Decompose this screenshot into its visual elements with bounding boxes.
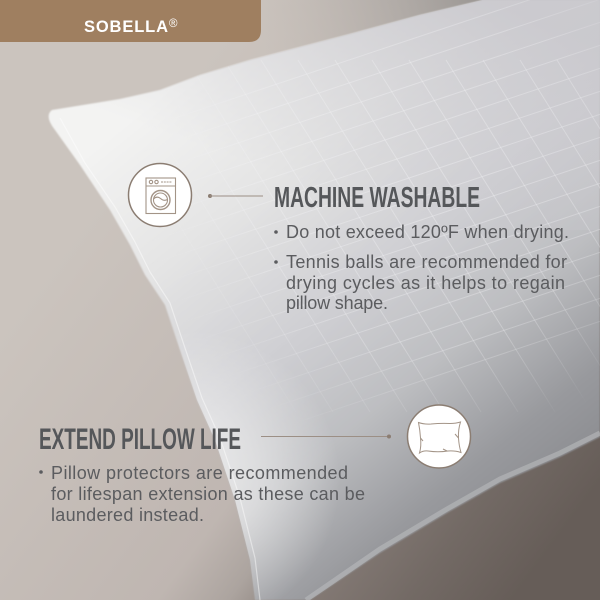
text block: machine washable tips: [274, 222, 569, 313]
heading: machine washable: MACHINE WASHABLE: [274, 182, 480, 214]
pillow piping: [118, 214, 260, 600]
connector: extend pillow life: [261, 434, 391, 438]
text block: extend pillow life tip: [39, 463, 365, 525]
heading: extend pillow life: EXTEND PILLOW LIFE: [39, 423, 241, 456]
text block: extend pillow life tip: for lifespan extension as these can be: [51, 484, 365, 504]
text block: extend pillow life tip: laundered instead.: [51, 505, 204, 525]
brand name: SOBELLA: [84, 18, 168, 36]
icon: pillow: [408, 405, 470, 468]
registered mark: ®: [169, 18, 178, 30]
connector: machine washable: [208, 194, 263, 198]
text block: machine washable tips: pillow shape.: [286, 293, 388, 313]
text block: machine washable tips: Tennis balls are recommended for: [286, 252, 567, 272]
text block: extend pillow life tip: Pillow protectors are recommended: [51, 463, 348, 483]
text block: machine washable tips: Do not exceed 120ºF when drying.: [286, 222, 569, 242]
icon: washing machine: [128, 164, 192, 226]
header tab: [0, 0, 261, 42]
text block: machine washable tips: drying cycles as it helps to regain: [286, 273, 565, 293]
